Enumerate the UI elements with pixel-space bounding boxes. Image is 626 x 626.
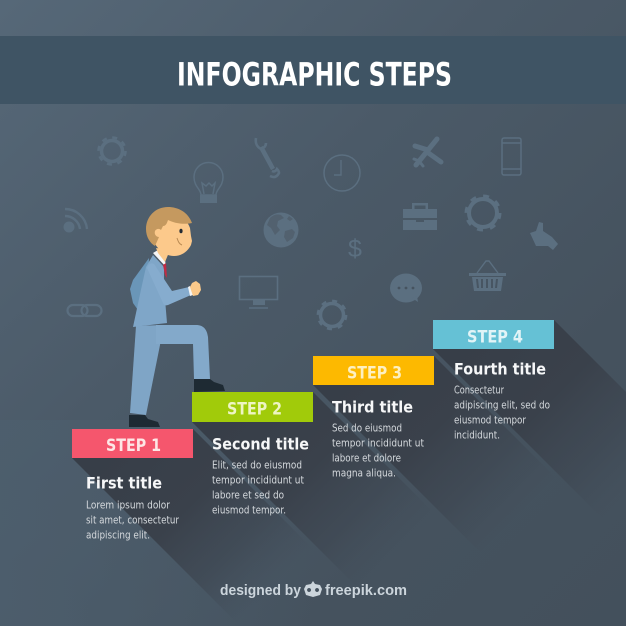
shirt collar [153,250,166,267]
step 2 heading: Second title [212,434,309,454]
step 3 panel [313,356,434,480]
step 1 heading: First title [86,474,162,492]
step 2 body [212,460,304,516]
jacket [133,255,167,327]
icon: freepik logo [304,581,322,597]
step 2 body: Elit, sed do eiusmod [212,460,302,472]
back shoe [129,415,160,427]
step 4 body [454,384,550,442]
step 1 body: adipiscing elit. [86,530,150,542]
long shadows [72,320,626,626]
step 1 label: STEP 1 [106,436,161,456]
step 3 label: STEP 3 [347,364,402,384]
person climbing [129,207,225,427]
icon: gear large [466,196,500,230]
back leg [130,325,162,415]
step 2 bar [192,392,313,422]
step 4 body: eiusmod tempor [454,414,527,426]
icon: speech bubble [390,274,422,302]
step 3 body [332,422,424,480]
step 2 panel [192,392,313,516]
step 3 body: labore et dolore [332,452,401,464]
step 4 body: Consectetur [454,384,505,396]
icon: wifi signal [64,209,87,232]
smile [177,238,182,245]
icon: light bulb [194,162,223,203]
icon: gear small [318,301,346,329]
icon: briefcase [403,203,437,230]
step 4 body: incididunt. [454,430,500,442]
step 4 bar [433,320,554,349]
step 3 body: tempor incididunt ut [332,438,424,450]
step 3 heading: Third title [332,398,413,416]
icon: airplane [414,139,441,166]
icon: shopping basket [469,261,506,291]
icon: gear [98,138,126,164]
step 4 panel [433,320,554,442]
eye [179,229,183,233]
icon: smartphone [502,138,521,175]
hair [146,207,192,246]
background icons [64,138,558,329]
step 4 body: adipiscing elit, sed do [454,400,550,412]
icon: clock [324,155,360,191]
step 1 body: sit amet, consectetur [86,514,180,526]
icon: thumbs up [530,222,558,250]
step 1 bar [72,429,193,458]
title: INFOGRAPHIC STEPS [177,56,452,94]
step 1 panel [72,429,193,542]
shirt cuff [188,286,193,296]
step 3 body: Sed do eiusmod [332,422,402,434]
step 3 bar [313,356,434,385]
icon: chain link [68,305,102,316]
step 4 heading: Fourth title [454,360,546,378]
designed by text: designed by [220,582,302,599]
step 1 body [86,500,180,542]
jacket back panel [130,258,149,313]
step 2 body: labore et sed do [212,490,284,502]
arm [147,263,191,305]
step 1 body: Lorem ipsum dolor [86,500,171,512]
step 2 label: STEP 2 [227,400,282,420]
title banner [0,36,626,104]
step 3 body: magna aliqua. [332,468,396,480]
step 2 body: eiusmod tempor. [212,504,286,516]
footer credit [220,581,407,599]
head [152,212,192,256]
icon: wrench [256,138,279,177]
icon: globe [264,212,298,248]
step 2 body: tempor incididunt ut [212,474,304,486]
front leg [156,325,210,379]
step 4 label: STEP 4 [467,328,523,348]
front shoe [194,379,225,392]
tie [163,263,167,278]
icon: dollar sign: $ [348,235,362,263]
icon: monitor [240,276,278,308]
neck [156,248,170,262]
freepik.com text: freepik.com [325,582,407,599]
hand [190,281,201,296]
